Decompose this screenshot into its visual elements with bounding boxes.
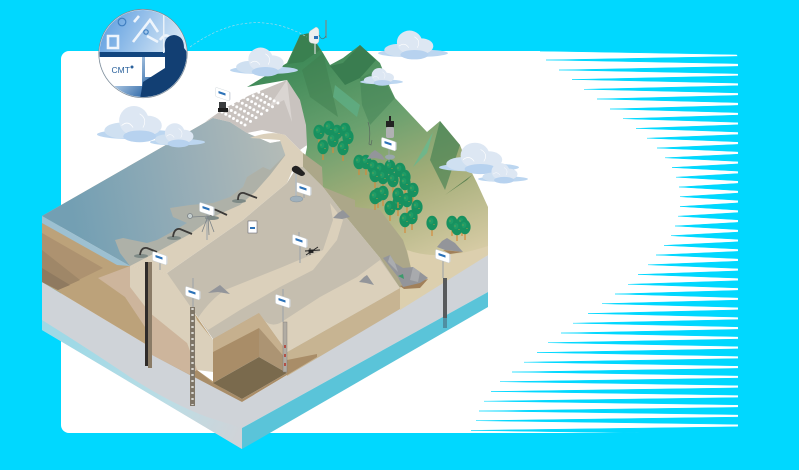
left face: aquifer band <box>42 320 242 449</box>
rock face <box>205 80 307 150</box>
camera on pole <box>290 166 305 202</box>
pipe lines <box>140 193 257 255</box>
well <box>443 278 447 328</box>
panel sign <box>248 221 257 233</box>
right face: bedrock <box>242 255 488 428</box>
blueprint screen <box>99 9 187 53</box>
beige band lower <box>262 260 400 352</box>
trees <box>313 121 471 241</box>
dashed data link arc <box>190 23 307 47</box>
beige band upper <box>198 203 343 330</box>
rock highlight <box>268 80 292 122</box>
pit <box>213 313 317 402</box>
soil layers <box>42 223 242 402</box>
sea <box>42 118 300 273</box>
blueprint gears <box>118 18 148 34</box>
shallows <box>42 118 287 266</box>
lens: control room <box>99 9 187 99</box>
tan strip <box>287 288 400 376</box>
logo text: CMT <box>112 65 130 75</box>
operator silhouette <box>140 35 187 99</box>
window frame <box>99 52 187 57</box>
sensor stems <box>160 148 443 322</box>
rocks <box>208 150 463 294</box>
weather station <box>188 214 214 235</box>
land surface <box>167 167 400 352</box>
drone <box>305 247 320 255</box>
sand foot <box>400 246 488 310</box>
cloud: left behind block <box>97 106 179 142</box>
sand path <box>250 133 303 167</box>
left face: bedrock <box>42 282 242 449</box>
block: isometric landscape <box>42 33 488 449</box>
prisms on rock <box>222 90 278 125</box>
panel: comb-edge spikes <box>471 51 738 433</box>
water side band <box>42 216 130 266</box>
desk panels <box>99 57 187 99</box>
pipe mounds <box>134 199 246 258</box>
antenna box on summit <box>309 20 326 54</box>
right face: aquifer <box>242 292 488 449</box>
weather mast <box>368 116 395 159</box>
pipes into sea <box>134 193 257 258</box>
sensor string <box>190 307 195 406</box>
inclinometer pipe <box>145 262 152 368</box>
control box on rock <box>218 102 228 112</box>
water <box>42 118 287 266</box>
boreholes <box>145 262 447 406</box>
olive slope <box>303 153 412 288</box>
piezometer <box>283 322 287 372</box>
clouds <box>150 31 528 183</box>
blueprint drawing <box>108 16 170 48</box>
panel: white card <box>61 51 738 433</box>
mountain facets <box>288 33 472 195</box>
hillside base <box>247 33 488 308</box>
